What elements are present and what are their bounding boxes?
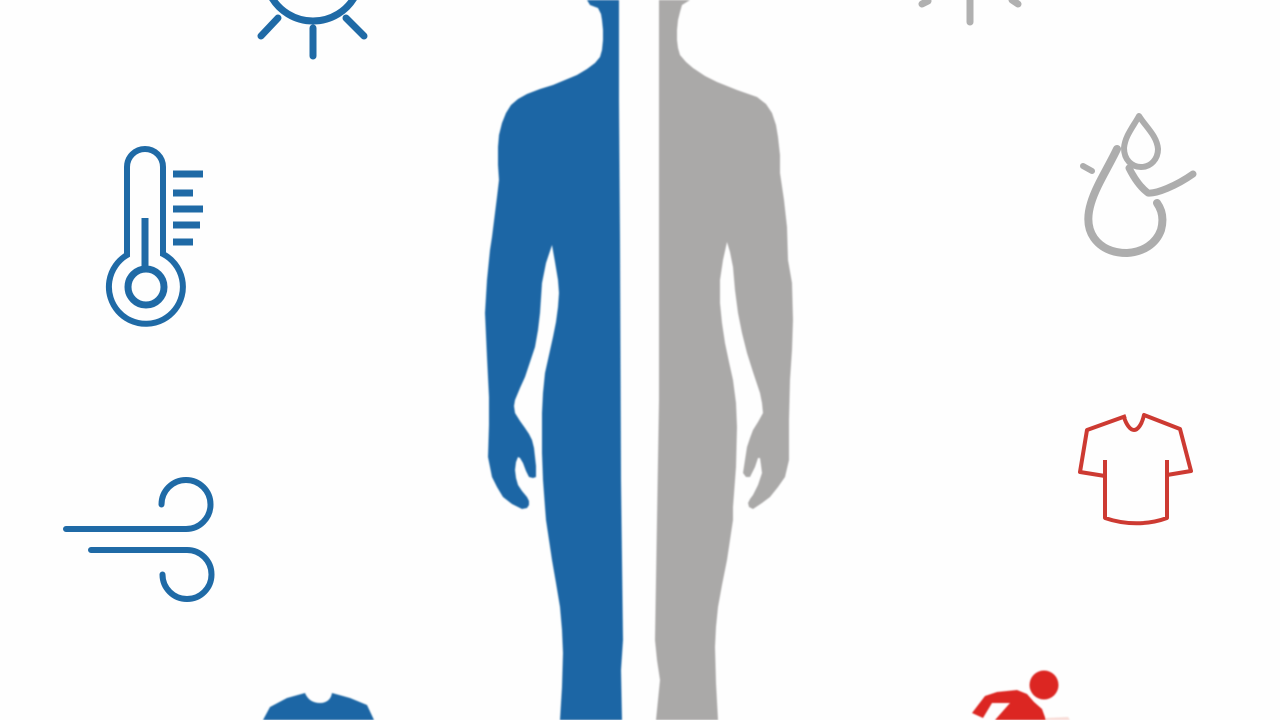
icon: red t-shirt: [1080, 415, 1191, 523]
icon: grey sun: [922, 0, 1018, 22]
icon: sun: [261, 0, 364, 56]
icon: thermometer: [109, 149, 203, 324]
icon: wind: [66, 480, 211, 599]
body silhouette: grey right half: [655, 0, 793, 720]
icon: blue t-shirt: [263, 693, 374, 720]
icon: red runner: [972, 670, 1070, 720]
icon: humidity drops: [1083, 116, 1193, 253]
body silhouette: blue left half: [485, 0, 623, 720]
